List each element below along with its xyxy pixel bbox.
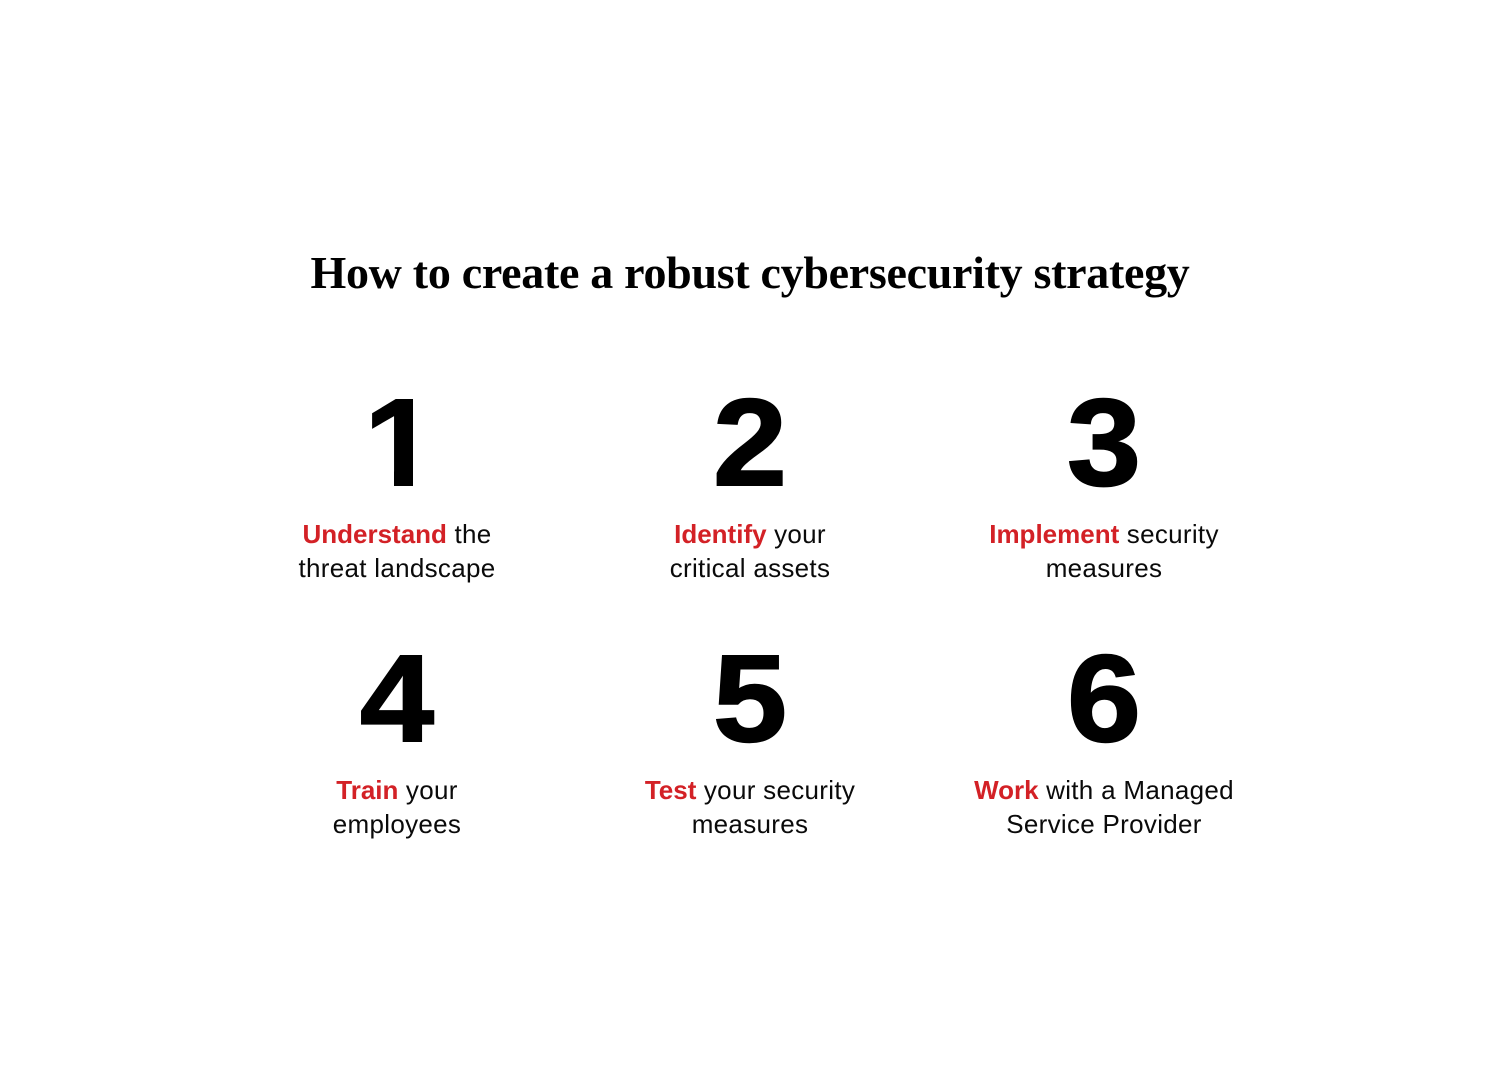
step 5 [645, 630, 855, 839]
step 6 text: Service Provider [1006, 809, 1202, 839]
step 1 text [298, 519, 496, 583]
number 3: 3 [1067, 374, 1141, 512]
number 1: 1 [364, 374, 438, 512]
number 6: 6 [1067, 630, 1141, 768]
step 4 text: Train your [336, 775, 458, 805]
step 5 text [645, 775, 855, 839]
title: How to create a robust cybersecurity strategy [310, 247, 1190, 298]
step 3 text: Implement security [989, 519, 1219, 549]
step 3 [989, 374, 1219, 583]
step 2 [670, 374, 830, 583]
step 4 text [333, 775, 461, 839]
number 4: 4 [360, 630, 434, 768]
step 3 text [989, 519, 1219, 583]
number 2: 2 [713, 374, 787, 512]
step 5 text: measures [692, 809, 808, 839]
step 2 text: critical assets [670, 553, 830, 583]
step 1 [298, 399, 496, 583]
step 6 text: Work with a Managed [974, 775, 1234, 805]
step 1 text: threat landscape [298, 553, 496, 583]
step 6 text [974, 775, 1234, 839]
step 4 [333, 630, 461, 839]
number 5: 5 [713, 630, 787, 768]
step 2 text: Identify your [674, 519, 826, 549]
step 3 text: measures [1046, 553, 1162, 583]
step 6 [974, 630, 1234, 839]
step 5 text: Test your security [645, 775, 855, 805]
step 1 text: Understand the [302, 519, 492, 549]
step 4 text: employees [333, 809, 461, 839]
step 2 text [670, 519, 830, 583]
